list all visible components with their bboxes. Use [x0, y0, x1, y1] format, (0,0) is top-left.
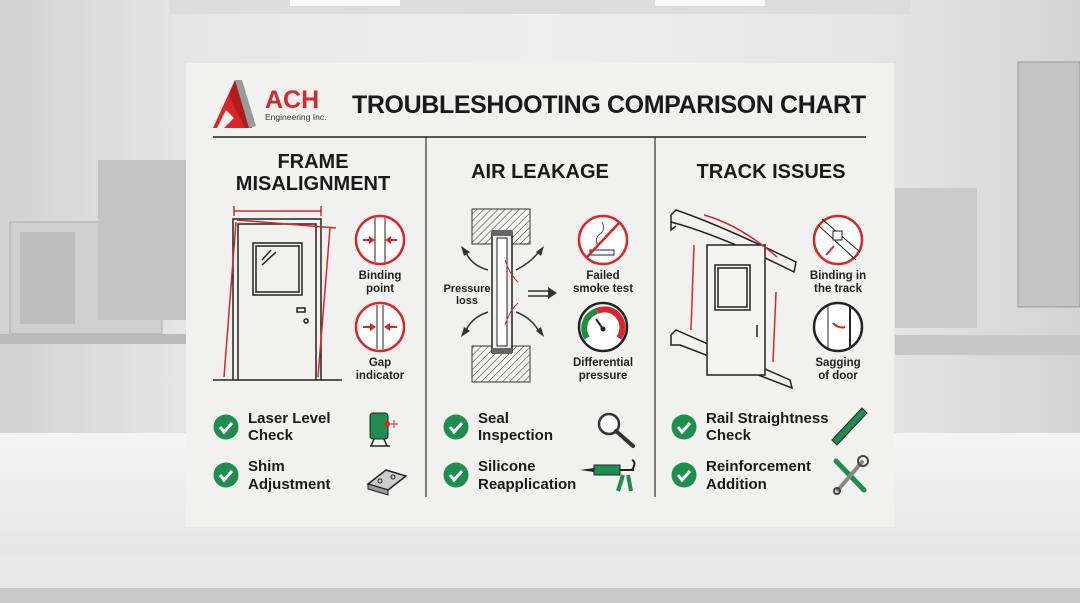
heading: frame misalignment: FRAME [277, 151, 349, 173]
icon: sagging of door: of door [818, 370, 858, 382]
icon: caulk gun [580, 460, 634, 491]
icon: sagging of door [814, 303, 862, 382]
icon: differential pressure gauge [573, 303, 633, 382]
solutions: Reapplication [478, 476, 576, 493]
solutions: Silicone [478, 458, 536, 475]
icon: binding in the track: Binding in [810, 270, 866, 282]
air leakage diagram: loss [456, 295, 478, 307]
icon: failed smoke test [573, 216, 633, 295]
solutions [214, 410, 829, 493]
solutions: Addition [706, 476, 767, 493]
icon: binding in the track [810, 216, 866, 295]
icon: failed smoke test: smoke test [573, 283, 633, 295]
icon: gap indicator: indicator [356, 370, 405, 382]
heading: frame misalignment: MISALIGNMENT [236, 173, 390, 195]
icon: gap indicator [356, 303, 405, 382]
heading: track issues: TRACK ISSUES [697, 161, 845, 183]
solutions: Check [248, 427, 294, 444]
solutions: Rail Straightness [706, 410, 829, 427]
solutions: Adjustment [248, 476, 331, 493]
air leakage diagram: Pressure [443, 283, 491, 295]
air leakage diagram [443, 209, 557, 382]
heading: frame misalignment [236, 151, 390, 195]
icon: wrench and screwdriver [834, 456, 868, 494]
icon: binding in the track: the track [814, 283, 863, 295]
logo: ACH [265, 86, 319, 114]
board [186, 63, 894, 527]
door diagram [213, 206, 342, 380]
solutions: Check [706, 427, 752, 444]
icon: differential pressure gauge: pressure [579, 370, 627, 382]
track diagram [671, 210, 796, 388]
solutions: Laser Level [248, 410, 331, 427]
solutions: Inspection [478, 427, 553, 444]
solutions: Reinforcement [706, 458, 811, 475]
icon: laser level [370, 413, 398, 446]
icon: magnifier [599, 414, 633, 446]
icon: binding point: point [366, 283, 394, 295]
icon: binding point [356, 216, 404, 295]
icon: gap indicator: Gap [369, 357, 391, 369]
icon: binding point: Binding [359, 270, 401, 282]
icon: ruler [832, 408, 867, 445]
icon: shim [368, 470, 406, 495]
solutions: Shim [248, 458, 285, 475]
solutions: Seal [478, 410, 509, 427]
logo [213, 80, 326, 128]
heading: air leakage: AIR LEAKAGE [471, 161, 609, 183]
icon: sagging of door: Sagging [815, 357, 861, 369]
title: TROUBLESHOOTING COMPARISON CHART [352, 91, 866, 119]
logo: Engineering Inc. [265, 112, 326, 122]
icon: differential pressure gauge: Differential [573, 357, 633, 369]
icon: failed smoke test: Failed [586, 270, 620, 282]
